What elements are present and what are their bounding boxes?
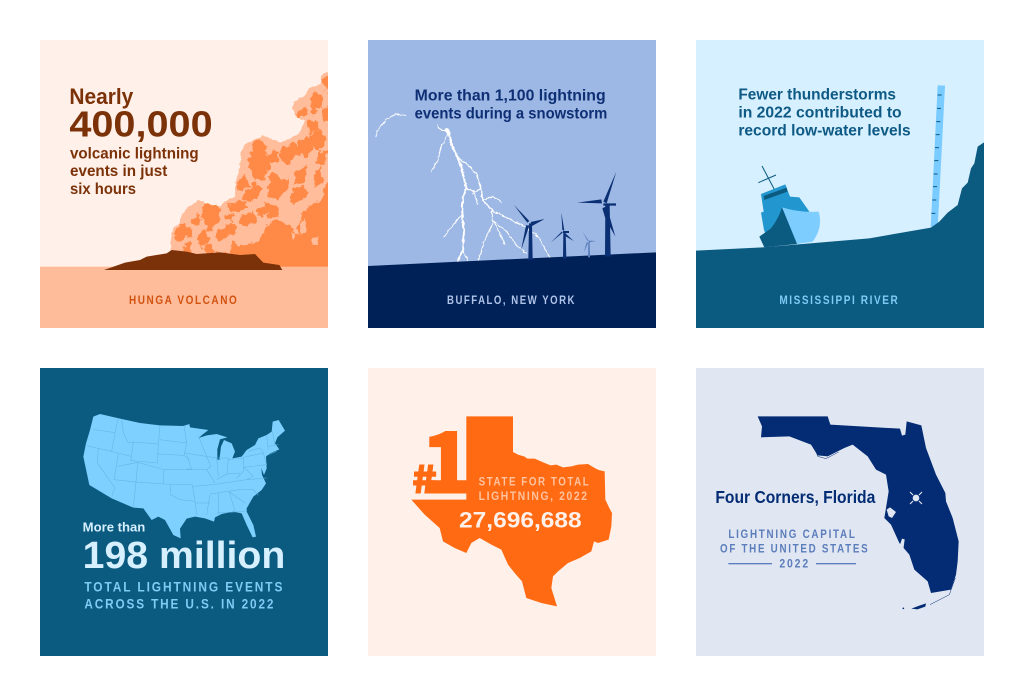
heading: More than 1,100 lightning <box>415 88 606 105</box>
panel: Mississippi River <box>696 40 984 328</box>
heading: Four Corners, Florida <box>715 487 876 507</box>
ground <box>368 252 656 328</box>
label: Mississippi River: MISSISSIPPI RIVER <box>779 294 899 307</box>
caption: STATE FOR TOTAL <box>479 475 590 488</box>
rank: #1: 1 <box>421 395 473 518</box>
panel: Texas <box>368 368 656 656</box>
sea <box>40 267 328 328</box>
heading: nearly 400,000: Nearly <box>69 84 134 109</box>
heading: Fewer thunderstorms <box>738 86 896 103</box>
illustration: wind turbines <box>514 172 616 260</box>
illustration: volcanic island <box>104 250 282 270</box>
illustration: lightning bolts <box>376 114 551 263</box>
heading: nearly 400,000: 400,000 <box>69 104 213 145</box>
heading: record low-water levels <box>738 122 911 139</box>
heading: in 2022 contributed to <box>738 104 902 121</box>
illustration: grounded ship <box>758 166 820 247</box>
caption: 2022 <box>779 556 810 570</box>
illustration: eruption cloud <box>170 71 338 273</box>
caption: TOTAL LIGHTNING EVENTS <box>84 579 284 594</box>
heading: events during a snowstorm <box>415 106 607 123</box>
map: Texas <box>411 416 612 606</box>
panel: U.S. total lightning <box>40 368 328 656</box>
heading <box>738 86 911 139</box>
caption <box>84 579 284 612</box>
icon: Four Corners lightning marker <box>910 492 922 504</box>
map: contiguous United States <box>83 414 285 538</box>
panel: Florida <box>696 368 984 656</box>
label: Hunga Volcano: HUNGA VOLCANO <box>129 294 238 307</box>
panel: Buffalo, New York <box>368 40 656 328</box>
caption: OF THE UNITED STATES <box>720 542 869 556</box>
panel: Hunga Volcano <box>40 40 328 328</box>
statistic: 27,696,688: 27,696,688 <box>459 507 582 532</box>
heading: nearly 400,000: events in just <box>70 163 168 180</box>
river bank <box>696 142 984 328</box>
label: Buffalo, New York: BUFFALO, NEW YORK <box>447 294 576 307</box>
rank: #1: # <box>412 449 437 504</box>
illustration: water gauge <box>931 85 945 228</box>
caption: LIGHTNING, 2022 <box>479 490 589 503</box>
caption <box>720 527 869 570</box>
statistic: 198 million: More than <box>83 520 145 534</box>
caption: LIGHTNING CAPITAL <box>728 527 857 541</box>
map: Florida <box>758 416 959 609</box>
statistic: 198 million: 198 million <box>83 535 285 577</box>
caption: ACROSS THE U.S. IN 2022 <box>84 597 275 612</box>
heading <box>415 88 607 123</box>
heading: nearly 400,000: six hours <box>70 181 136 198</box>
heading: nearly 400,000: volcanic lightning <box>70 146 199 163</box>
caption <box>479 475 590 503</box>
heading: nearly 400,000 <box>69 84 213 198</box>
